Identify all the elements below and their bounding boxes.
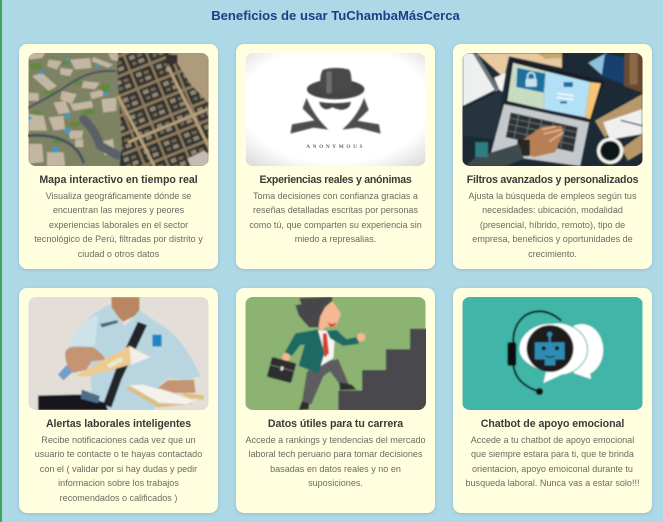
image: chatbot headset icon bbox=[462, 297, 643, 410]
description: necesidades: ubicación, modalidad bbox=[482, 205, 623, 215]
description: Visualiza geográficamente dónde se bbox=[46, 190, 191, 200]
heading: Mapa interactivo en tiempo real bbox=[39, 174, 198, 186]
title: Beneficios de usar TuChambaMásCerca bbox=[211, 8, 460, 23]
description: tecnológico de Perú, filtradas por distrito y bbox=[34, 234, 203, 244]
panel: datos útiles bbox=[236, 288, 435, 513]
heading: Alertas laborales inteligentes bbox=[46, 418, 191, 430]
anonymous label: ANONYMOUS bbox=[306, 144, 365, 150]
description: (presencial, híbrido, remoto), tipo de bbox=[480, 220, 625, 230]
description: Accede a tu chatbot de apoyo emocional bbox=[471, 434, 634, 444]
description bbox=[465, 434, 640, 488]
panel: experiencias anónimas bbox=[236, 44, 435, 269]
description: con el ( validar por si hay dudas y pedir bbox=[40, 464, 197, 474]
heading: Chatbot de apoyo emocional bbox=[481, 418, 624, 430]
heading: Datos útiles para tu carrera bbox=[268, 418, 403, 430]
description: Accede a rankings y tendencias del mercado bbox=[245, 434, 426, 444]
description: suposiciones. bbox=[308, 478, 363, 488]
heading: Experiencias reales y anónimas bbox=[259, 174, 412, 186]
description: miedo a represalias. bbox=[295, 234, 376, 244]
description: reseñas detalladas escritas por personas bbox=[253, 205, 418, 215]
description: encuentran las mejores y peores bbox=[53, 205, 184, 215]
image: laptop on desk bbox=[462, 53, 643, 166]
description: Toma decisiones con confianza gracias a bbox=[253, 190, 418, 200]
description bbox=[34, 190, 203, 259]
panel: filtros avanzados bbox=[453, 44, 652, 269]
image: mail carrier handing letters bbox=[28, 297, 208, 410]
image: man climbing stairs bbox=[245, 297, 426, 410]
description bbox=[249, 190, 422, 244]
description: usuario te contacte o te hayas contactado bbox=[35, 449, 202, 459]
description: Ajusta la búsqueda de empleos según tus bbox=[468, 190, 636, 200]
description: experiencias laborales en el sector bbox=[49, 220, 188, 230]
description bbox=[245, 434, 426, 488]
description: Recibe notificaciones cada vez que un bbox=[41, 434, 196, 444]
panel: mapa interactivo bbox=[19, 44, 218, 269]
panel: chatbot bbox=[453, 288, 652, 513]
description: recomendados o calificados ) bbox=[60, 493, 177, 503]
description: ciudad o otros datos bbox=[78, 249, 159, 259]
heading: Filtros avanzados y personalizados bbox=[467, 174, 638, 186]
description: empresa, beneficios y oportunidades de bbox=[472, 234, 633, 244]
description: crecimiento. bbox=[528, 249, 577, 259]
description: busqueda laboral. Nunca vas a estar solo!!! bbox=[465, 478, 640, 488]
image: anonymous figure bbox=[246, 53, 426, 166]
description bbox=[35, 434, 202, 503]
description: basadas en datos reales y no en bbox=[270, 464, 401, 474]
panel: alertas laborales bbox=[19, 288, 218, 513]
description: orientacion, apoyo emoiconal durante tu bbox=[472, 464, 633, 474]
description bbox=[468, 190, 636, 259]
description: como tú, que comparten su experiencia sin bbox=[249, 220, 422, 230]
description: laboral tech peruano para tomar decisiones bbox=[248, 449, 422, 459]
image: aerial city view bbox=[28, 53, 209, 166]
description: que siempre estara para ti, que te brinda bbox=[471, 449, 634, 459]
description: informacion sobre los trabajos bbox=[58, 478, 179, 488]
